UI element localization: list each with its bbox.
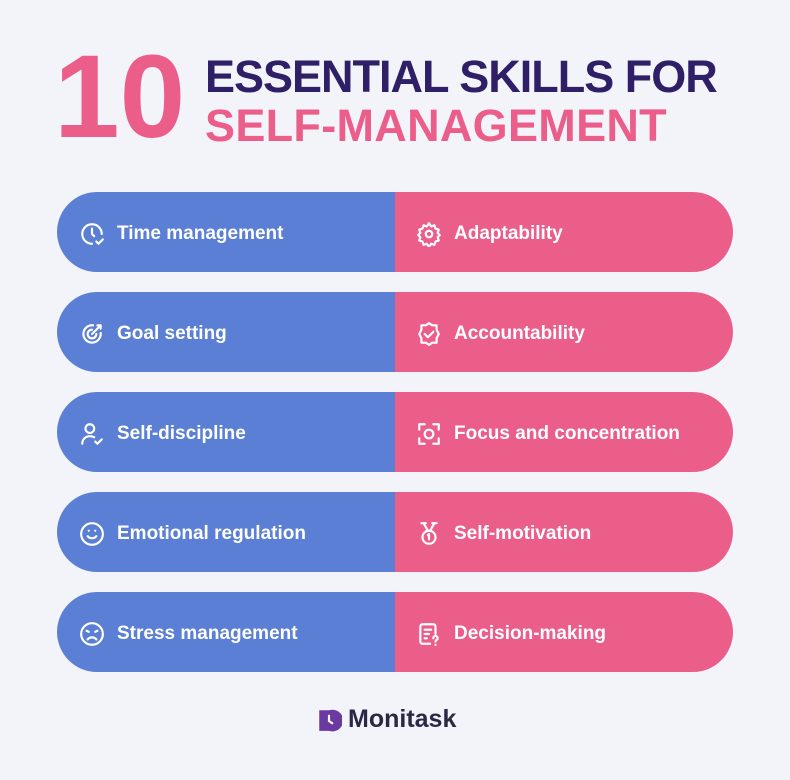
skill: accountability: Accountability <box>454 322 585 344</box>
skill: self-motivation: Self-motivation <box>454 522 591 544</box>
skill: self-motivation <box>395 492 733 572</box>
skill: decision-making <box>395 592 733 672</box>
skill: adaptability <box>395 192 733 272</box>
row 2 <box>57 292 733 372</box>
skill: stress management <box>57 592 395 672</box>
title line 1: ESSENTIAL SKILLS FOR <box>205 51 717 102</box>
row 5 <box>57 592 733 672</box>
skill: time management <box>57 192 395 272</box>
skill: accountability <box>395 292 733 372</box>
skill: focus and concentration <box>395 392 733 472</box>
skill: emotional regulation <box>57 492 395 572</box>
skill: time management: Time management <box>117 222 283 244</box>
skill: goal setting <box>57 292 395 372</box>
skill: self-discipline: Self-discipline <box>117 422 246 444</box>
skill: decision-making: Decision-making <box>454 622 606 644</box>
title: number 10: 10 <box>54 31 185 163</box>
row 4 <box>57 492 733 572</box>
skill: self-discipline <box>57 392 395 472</box>
skill: focus and concentration: Focus and concentration <box>454 422 680 444</box>
logo: Monitask: Monitask <box>348 705 456 733</box>
skill: goal setting: Goal setting <box>117 322 227 344</box>
title line 2: SELF-MANAGEMENT <box>205 100 667 151</box>
row 1 <box>57 192 733 272</box>
row 3 <box>57 392 733 472</box>
skill: adaptability: Adaptability <box>454 222 563 244</box>
skill: emotional regulation: Emotional regulation <box>117 522 306 544</box>
skill: stress management: Stress management <box>117 622 298 644</box>
